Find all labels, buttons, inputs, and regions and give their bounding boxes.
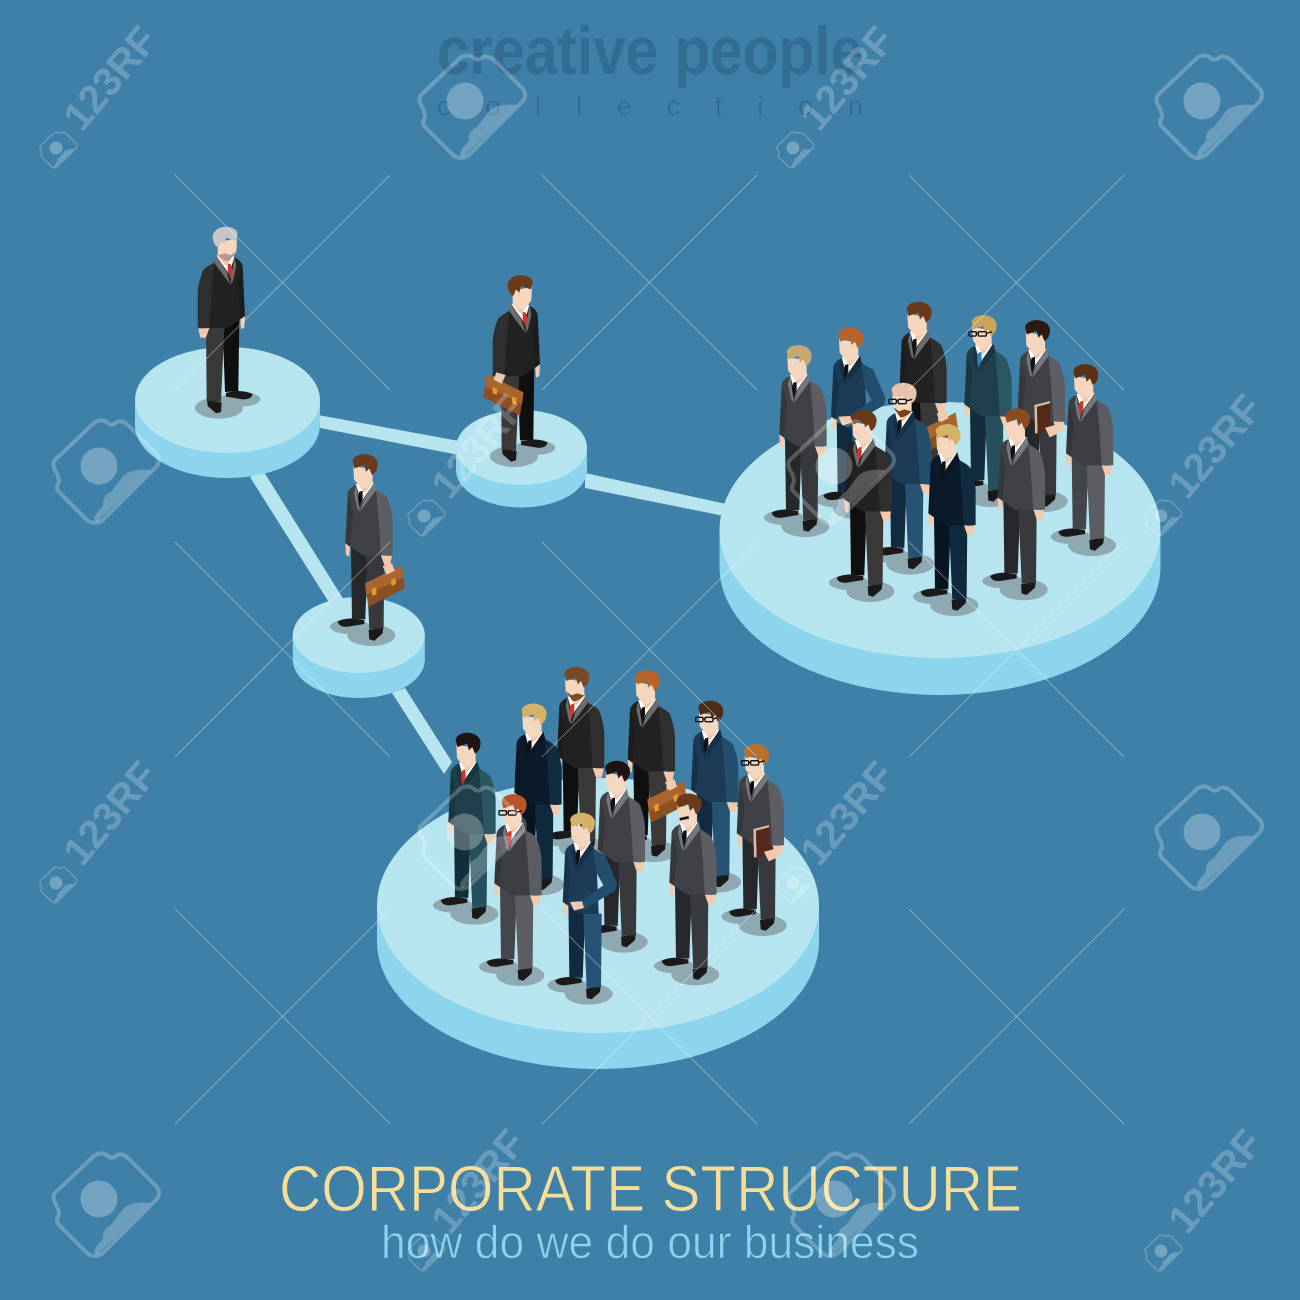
title: creative people collection (437, 13, 863, 121)
person: orange hair with briefcase (620, 670, 687, 857)
stamp text 1: 123RF (55, 19, 166, 139)
person: brown hair grey suit (990, 408, 1045, 595)
stamp icon 13 (53, 1153, 159, 1256)
stamp icon 15 (788, 1153, 894, 1256)
person: brown hair red tie, far right (1058, 364, 1113, 551)
figure shadows on platforms (195, 392, 1116, 1005)
person: orange hair, hand on hip (823, 327, 886, 514)
person: black hair teal suit red tie (441, 733, 496, 919)
person: orange hair glasses with book (729, 744, 784, 931)
stamp text 3: 123RF (792, 19, 903, 139)
stamp text 11: 123RF (792, 754, 903, 874)
figure: manager with briefcase (483, 275, 548, 462)
person: black hair grey suit (590, 761, 645, 947)
stamp text 16: 123RF (1160, 1122, 1271, 1242)
platform: large bottom circle (377, 778, 819, 1069)
subheading: how do we do our business: how do we do our business (381, 1216, 919, 1268)
logo subtitle: collection (437, 91, 863, 121)
platform: top-left circle (135, 347, 320, 478)
heading: corporate structure: CORPORATE STRUCTURE (279, 1152, 1022, 1225)
figure: senior executive with grey hair (198, 227, 253, 413)
stamp icon 2 (419, 55, 525, 158)
stamp icon 10 (419, 786, 525, 889)
stamp icon 12 (1156, 786, 1262, 889)
person: dark hair with book (1010, 320, 1065, 507)
person: blonde navy suit, hand on hip (555, 813, 617, 999)
person: blonde grey suit (772, 345, 827, 532)
person: blonde with glasses and blue tie (957, 315, 1012, 502)
person: glasses navy suit (683, 701, 738, 887)
platform: upper small circle (456, 410, 587, 508)
person: blonde black suit (921, 424, 976, 611)
platform: large right circle (720, 402, 1160, 695)
watermark: thin diagonal crosses (175, 175, 1124, 1124)
logo wordmark: creative people (437, 13, 863, 89)
person: brown hair red tie, black suit (837, 410, 892, 597)
person: moustache grey suit (662, 793, 717, 980)
stamp icon 7 (788, 420, 894, 523)
connector lines between platforms (250, 415, 726, 774)
platform: middle small circle (293, 597, 425, 698)
group: bottom team (441, 667, 784, 999)
person: bearded, red tie (549, 667, 604, 853)
stamp icon 4 (1156, 55, 1262, 158)
person: bald with glasses and beard (877, 383, 932, 569)
figure: manager with briefcase, lower (338, 454, 405, 641)
stamp text 6: 123RF (423, 387, 534, 507)
stamp icon 5 (53, 420, 159, 523)
person: brown hair with briefcase (892, 302, 959, 488)
person: red hair glasses red tie (487, 794, 542, 981)
stamp text 14: 123RF (423, 1122, 534, 1242)
group: right team (772, 302, 1113, 611)
person: blonde black suit (507, 703, 562, 890)
stamp text 9: 123RF (55, 754, 166, 874)
stamp text 8: 123RF (1160, 387, 1271, 507)
